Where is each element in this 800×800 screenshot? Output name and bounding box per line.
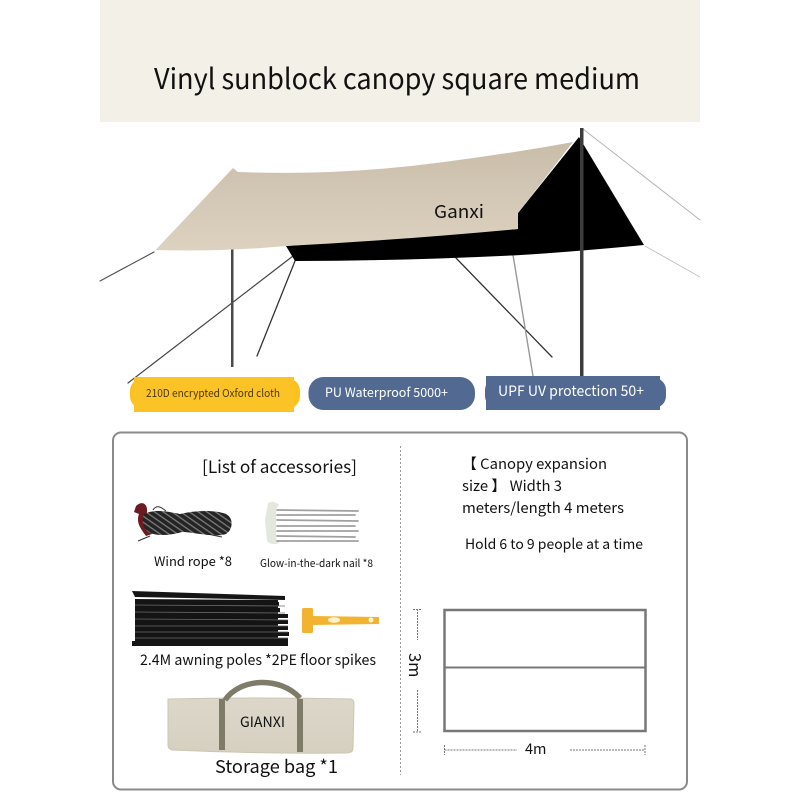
bag brand: GIANXI [240,712,285,732]
badge: waterproof [308,377,475,410]
text: canopy expansion size [462,453,624,518]
badge: oxford cloth [130,377,300,412]
label: storage bag: Storage bag *1 [215,753,338,779]
panel: accessories and size [113,432,687,790]
label: wind rope: Wind rope *8 [154,551,232,570]
diagram: canopy dimensions [404,609,646,759]
badge: UV protection: UPF UV protection 50+ [498,380,644,401]
text: capacity: Hold 6 to 9 people at a time [465,534,643,554]
black canopy side [286,137,644,261]
label: 4m: 4m [525,738,546,759]
label: poles and spikes: 2.4M awning poles *2PE floor spikes [140,649,376,670]
right pole [580,128,584,377]
left pole [231,248,234,367]
title banner [100,0,700,122]
text: canopy expansion size: size 】 Width 3 [462,475,562,496]
text: canopy expansion size: 【 Canopy expansion [462,453,607,474]
icon: wind rope [134,503,232,541]
badge: oxford cloth: 210D encrypted Oxford cloth [146,385,280,401]
heading: list of accessories: [List of accessories] [202,453,357,478]
tan canopy top [156,142,573,250]
icon: awning poles [132,591,289,646]
label: glow nails: Glow-in-the-dark nail *8 [260,556,373,571]
icon: floor spike [302,608,379,633]
guy ropes [100,129,700,383]
badge: UV protection [485,376,666,410]
badge: waterproof: PU Waterproof 5000+ [325,382,448,401]
icon: storage bag [168,682,354,753]
text: canopy expansion size: meters/length 4 meters [462,497,624,518]
brand label: Ganxi [434,198,484,224]
label: 3m: 3m [404,653,428,677]
canopy illustration [100,128,700,383]
title: Vinyl sunblock canopy square medium [154,57,640,98]
icon: glow nails [265,502,358,544]
